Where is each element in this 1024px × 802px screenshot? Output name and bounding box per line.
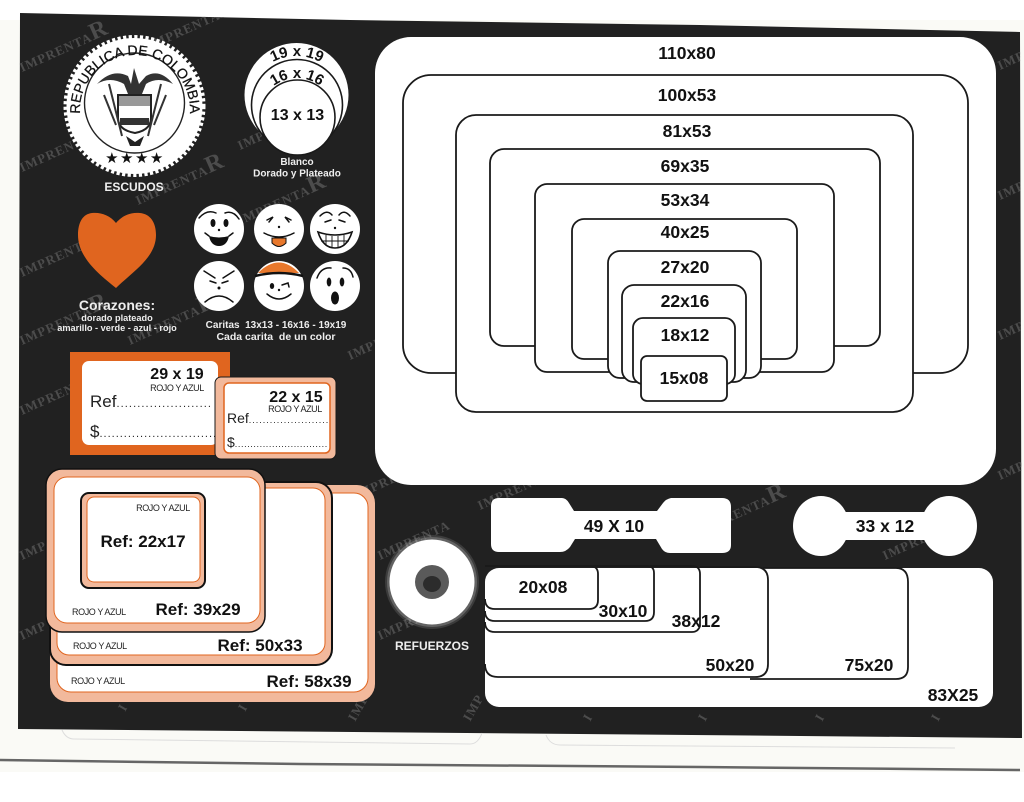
label 38x12: 38x12 — [672, 611, 721, 631]
label 58x39: Ref: 58x39 — [266, 672, 352, 691]
watermark pattern: IMPRENTA — [475, 467, 552, 513]
label 20x08 — [485, 566, 598, 609]
label 50x33: ROJO Y AZUL — [73, 641, 127, 651]
label 39x29: ROJO Y AZUL — [72, 607, 126, 617]
label 69x35: 69x35 — [661, 156, 710, 176]
caption: hearts: dorado plateado — [81, 313, 153, 323]
jewelry tag 33x12 — [793, 496, 977, 556]
label 75x20 — [750, 568, 908, 679]
round stickers: 19 x 19 — [270, 47, 324, 62]
watermark pattern: IMPRENTAR — [14, 115, 112, 177]
face: surprised — [310, 261, 360, 311]
label 15x08: 15x08 — [660, 368, 709, 388]
seal: Republica de Colombia: ★★★★ — [105, 150, 165, 167]
label 15x08 — [641, 356, 727, 401]
icon: reinforcement ring — [385, 535, 479, 629]
label 53x34 — [535, 184, 834, 372]
label 50x33 — [50, 482, 332, 665]
price label 29x19: 29 x 19 — [150, 366, 204, 383]
watermark pattern: IMPRENTAR — [372, 583, 470, 645]
watermark pattern: IMP — [17, 538, 49, 563]
paper fold line — [0, 760, 1020, 770]
watermark pattern: IMPRENTAR — [232, 168, 330, 230]
label 40x25 — [572, 219, 797, 359]
price label 22x15: ROJO Y AZUL — [268, 404, 322, 414]
watermark pattern: IMP — [460, 692, 487, 724]
watermark pattern: IMPRENTA — [17, 372, 94, 418]
jewelry tag 49x10 — [491, 498, 731, 553]
label 30x10 — [485, 566, 654, 621]
round stickers: 16 x 16 — [270, 70, 324, 86]
price label 29x19 — [70, 352, 230, 455]
label 58x39 — [50, 485, 375, 702]
jewelry tag 33x12: 33 x 12 — [856, 516, 914, 536]
caption: faces — [206, 320, 347, 343]
jewelry tag 49x10: 49 X 10 — [584, 516, 644, 536]
face: hat and wink — [254, 261, 304, 311]
label 81x53: 81x53 — [663, 121, 712, 141]
watermark pattern: I — [115, 701, 131, 714]
round stickers: 13 x 13 — [271, 107, 324, 124]
label 40x25: 40x25 — [661, 222, 710, 242]
price label 22x15: $.............................. — [227, 434, 328, 450]
label 69x35 — [490, 149, 880, 346]
seal: Republica de Colombia — [64, 35, 206, 177]
round stickers — [244, 43, 348, 154]
label 22x17 — [81, 493, 205, 588]
label 27x20: 27x20 — [661, 257, 710, 277]
label 22x16: 22x16 — [661, 291, 710, 311]
panel: nested rectangular labels bottom — [485, 566, 993, 707]
price label 29x19: ROJO Y AZUL — [150, 383, 204, 393]
caption: hearts: Corazones: — [79, 297, 155, 313]
seal: Republica de Colombia: REPUBLICA DE COLOMBIA — [70, 45, 200, 114]
watermark pattern: IMP — [17, 618, 49, 643]
label 100x53 — [403, 75, 968, 373]
label 39x29 — [46, 469, 265, 632]
icon: heart — [78, 213, 156, 288]
watermark pattern: IMPRENTAR — [130, 148, 228, 210]
icon: coat of arms — [97, 68, 173, 146]
watermark pattern: IMPRENTA — [375, 517, 452, 563]
caption: faces: Caritas 13x13 - 16x16 - 19x19 — [206, 320, 347, 331]
label 75x20: 75x20 — [845, 655, 894, 675]
watermark pattern: I — [812, 711, 828, 724]
watermark pattern: IMPRENTAR — [347, 443, 445, 505]
label 81x53 — [456, 115, 913, 412]
label 50x33: Ref: 50x33 — [217, 636, 303, 655]
watermark pattern: IMPRENTA — [880, 517, 957, 563]
label 53x34: 53x34 — [661, 190, 710, 210]
watermark pattern: IMPRENTAR — [14, 15, 112, 77]
price label 29x19: $.............................. — [90, 422, 221, 441]
watermark pattern: IMPRENTAR — [692, 478, 790, 540]
label 100x53: 100x53 — [658, 85, 716, 105]
caption: hearts: amarillo - verde - azul - rojo — [57, 323, 177, 333]
label 27x20 — [608, 251, 761, 378]
watermark pattern: IMPRENTAR — [232, 93, 330, 155]
panel: nested rectangular labels — [375, 37, 996, 485]
label 20x08: 20x08 — [519, 577, 568, 597]
panel: nested rectangular labels: 110x80 — [658, 43, 716, 63]
price label 29x19: Ref....................... — [90, 392, 212, 411]
face: happy — [194, 204, 244, 254]
label 22x16 — [622, 285, 746, 382]
face: grin — [310, 204, 360, 254]
label 38x12 — [485, 566, 721, 632]
label 39x29: Ref: 39x29 — [155, 600, 241, 619]
label 22x17: Ref: 22x17 — [100, 532, 186, 551]
label 18x12: 18x12 — [661, 325, 710, 345]
caption: round stickers: Dorado y Plateado — [253, 168, 341, 180]
price label 22x15: 22 x 15 — [269, 389, 323, 406]
caption: round stickers: Blanco — [280, 157, 314, 168]
label 50x20: 50x20 — [706, 655, 755, 675]
label 18x12 — [633, 318, 735, 384]
watermark pattern: I — [580, 711, 596, 724]
watermark pattern: I — [235, 701, 251, 714]
label 50x20 — [485, 567, 768, 677]
watermark pattern: IMPRENTA — [345, 317, 422, 363]
caption: hearts — [57, 297, 177, 333]
face: tongue — [254, 204, 304, 254]
watermark pattern: IMPRENTAR — [14, 288, 112, 350]
price label 22x15 — [215, 377, 336, 459]
label: escudos: ESCUDOS — [104, 180, 164, 194]
caption: faces: Cada carita de un color — [216, 331, 336, 343]
watermark pattern: I — [695, 711, 711, 724]
label 30x10: 30x10 — [599, 601, 648, 621]
label: refuerzos: REFUERZOS — [395, 639, 469, 653]
watermark pattern: I — [928, 711, 944, 724]
label 83x25: 83X25 — [928, 685, 979, 705]
watermark pattern: IMP — [345, 692, 372, 724]
label 58x39: ROJO Y AZUL — [71, 676, 125, 686]
watermark pattern: IMPRENTAR — [122, 288, 220, 350]
label 22x17: ROJO Y AZUL — [136, 503, 190, 513]
watermark pattern: IMPRENTAR — [14, 220, 112, 282]
price label 22x15: Ref....................... — [227, 410, 329, 426]
face: angry — [194, 261, 244, 311]
